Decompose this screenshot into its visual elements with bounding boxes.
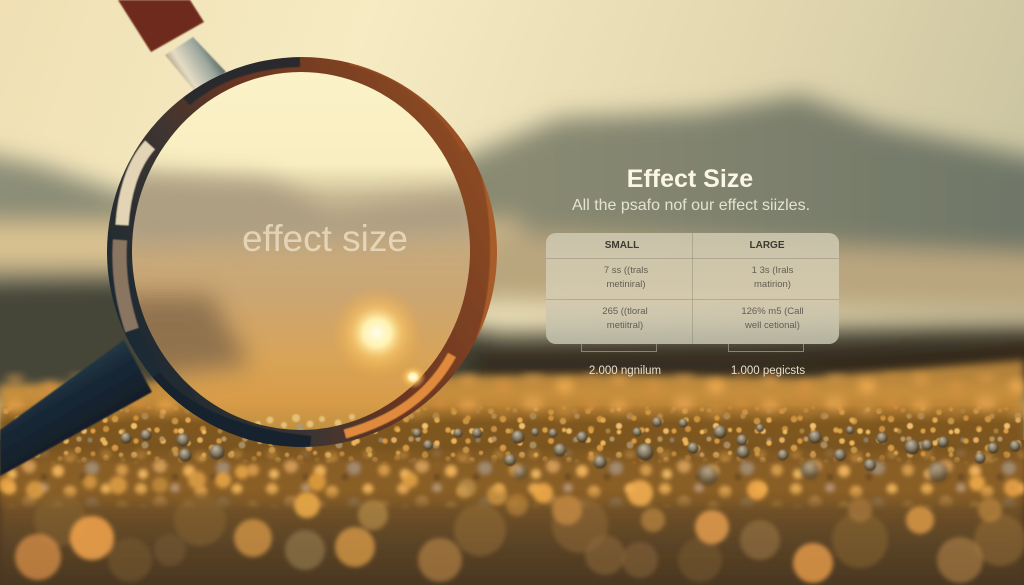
- bracket: small: [581, 344, 657, 352]
- cell: small row 2: 265 ((tloral: [602, 306, 648, 317]
- cell: large row 1: 1 3s (Irals: [752, 265, 793, 276]
- cell: large row 2: 126% m5 (Call: [741, 306, 804, 317]
- cell: small row 1: metiniral): [606, 279, 646, 290]
- bokeh lights: [0, 465, 1024, 583]
- caption: small sample: 2.000 ngnilum: [589, 365, 661, 377]
- lens rim: [104, 54, 500, 450]
- icon: upper handle: [118, 0, 226, 95]
- lens glass: [132, 72, 470, 430]
- caption: large sample: 1.000 pegicsts: [731, 365, 805, 377]
- column header: large: LARGE: [750, 240, 784, 251]
- sun reflection: [331, 287, 426, 389]
- cell: small row 2: metiitral): [607, 320, 643, 331]
- cell: small row 1: 7 ss ((trals: [604, 265, 648, 276]
- subtitle: All the psafo nof our effect siizles.: [572, 197, 810, 214]
- ground: golden pebbles: [0, 360, 1024, 585]
- cell: large row 1: [752, 265, 793, 290]
- icon: lower handle: [0, 340, 152, 476]
- cell: large row 1: matirion): [754, 279, 791, 290]
- cell: small row 1: [604, 265, 648, 290]
- column header: small: SMALL: [605, 240, 639, 251]
- bracket: large: [728, 344, 804, 352]
- comparison table: [546, 233, 839, 344]
- magnifying glass: [0, 0, 500, 476]
- cell: large row 2: [741, 306, 804, 331]
- cell: large row 2: well cetional): [745, 320, 800, 331]
- lens label: effect size: effect size: [242, 218, 408, 259]
- cell: small row 2: [602, 306, 648, 331]
- title: Effect Size: [627, 165, 753, 193]
